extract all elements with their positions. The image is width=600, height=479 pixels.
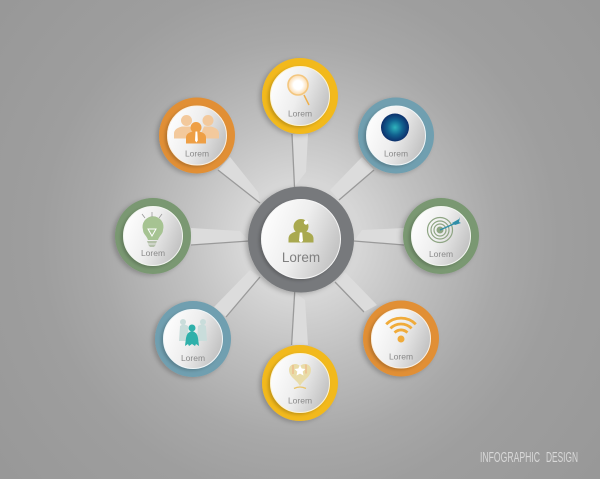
spokes connecting hub to nodes [191, 134, 404, 345]
icon: light bulb [142, 212, 164, 247]
node: bottom yellow [262, 345, 338, 421]
label: Lorem [288, 396, 312, 406]
node: lower left teal [155, 301, 231, 377]
central hub [248, 186, 354, 292]
label: Lorem [389, 352, 413, 362]
node: upper right teal [358, 98, 434, 174]
label: Lorem [185, 148, 209, 158]
icon: group of people [174, 115, 219, 144]
icon: team figures [179, 319, 207, 346]
label: Lorem [141, 248, 165, 258]
label: Lorem [288, 108, 312, 118]
icon: wifi [386, 318, 416, 342]
label: Lorem [181, 353, 205, 363]
hub label: Lorem [282, 250, 320, 265]
icon: businessman [288, 219, 314, 242]
icon: target with arrow [428, 217, 461, 242]
node: left green [115, 198, 191, 274]
icon: magnifier [288, 75, 309, 105]
label: Lorem [429, 249, 453, 259]
caption: infographic design: DESIGN [546, 450, 578, 466]
caption: infographic design: INFOGRAPHIC [480, 450, 540, 466]
node: top yellow [262, 58, 338, 134]
icon: trophy [289, 364, 311, 388]
icon: globe sphere [381, 114, 409, 142]
node: right green [403, 198, 479, 274]
node: upper left orange [159, 98, 235, 174]
node: lower right orange [363, 300, 439, 376]
label: Lorem [384, 148, 408, 158]
